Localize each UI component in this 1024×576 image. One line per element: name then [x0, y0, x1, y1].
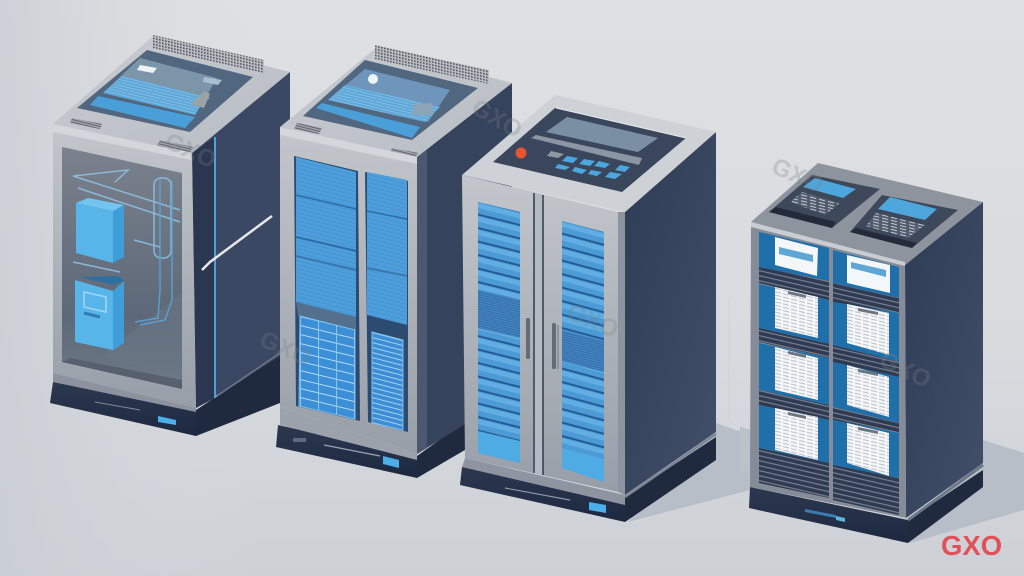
small vents 2: [294, 123, 418, 158]
glass window 1: [62, 147, 182, 389]
front frame 1: [53, 124, 196, 408]
cabinet 2: slatted door unit: [276, 45, 512, 478]
paper sheets left: [775, 237, 818, 460]
cabinet 4: document panel unit: [749, 163, 983, 543]
white rod: [202, 216, 272, 270]
door seam: [533, 193, 543, 475]
mesh vent 1: [153, 35, 264, 73]
keypad 3: [547, 151, 630, 179]
base plinth 4: [749, 470, 983, 543]
watermarks: GXO: [256, 326, 315, 372]
front frame 2: [280, 127, 417, 454]
left slat window 3: [478, 202, 520, 463]
right slat window 3: [562, 221, 604, 482]
front frame 4: [750, 222, 906, 518]
side panel 2: [417, 83, 512, 454]
display 3: [546, 117, 658, 152]
blue module lower: [75, 276, 124, 350]
label bar 3: [531, 135, 642, 165]
side panel 1: [192, 72, 290, 408]
watermarks: GXO: [768, 153, 827, 199]
small vents 1: [70, 118, 193, 152]
red button: [516, 148, 526, 158]
base plinth 1: [50, 355, 280, 436]
left panel column: [759, 232, 829, 498]
floor shadows: [207, 300, 1024, 543]
top face 4: [751, 163, 983, 265]
watermarks: GXO: [563, 299, 622, 344]
top face 3: [462, 95, 716, 212]
right window 2: [365, 172, 408, 432]
base plinth 2: [276, 418, 470, 478]
watermarks: GXO: [467, 94, 527, 144]
logo: GXO: GXO: [941, 530, 1002, 561]
top face 2: [280, 47, 512, 157]
left window 2: [294, 156, 360, 421]
mesh vent 2: [375, 45, 489, 84]
side panel 4: [905, 202, 983, 518]
control panel right: [850, 195, 958, 248]
top screen 2: [303, 60, 478, 140]
control panel 3: [493, 108, 686, 192]
right panel column: [833, 250, 899, 515]
base plinth 3: [460, 437, 716, 522]
paper sheets right: [847, 255, 890, 476]
side panel 3: [625, 132, 716, 495]
door handles: [526, 318, 559, 369]
front frame 3: [462, 175, 618, 492]
cabinet 1: glass door unit: [50, 35, 290, 436]
cabinet 3: double door unit: [460, 95, 716, 522]
door bottom rail 2: [280, 407, 417, 460]
top screen 1: [77, 50, 253, 132]
watermarks: [161, 94, 935, 394]
control panel left: [769, 175, 880, 228]
piping 1: [73, 170, 180, 325]
blue module upper: [76, 198, 124, 263]
watermarks: GXO: [875, 346, 935, 394]
watermarks: GXO: [161, 128, 220, 174]
top face 1: [53, 37, 290, 153]
